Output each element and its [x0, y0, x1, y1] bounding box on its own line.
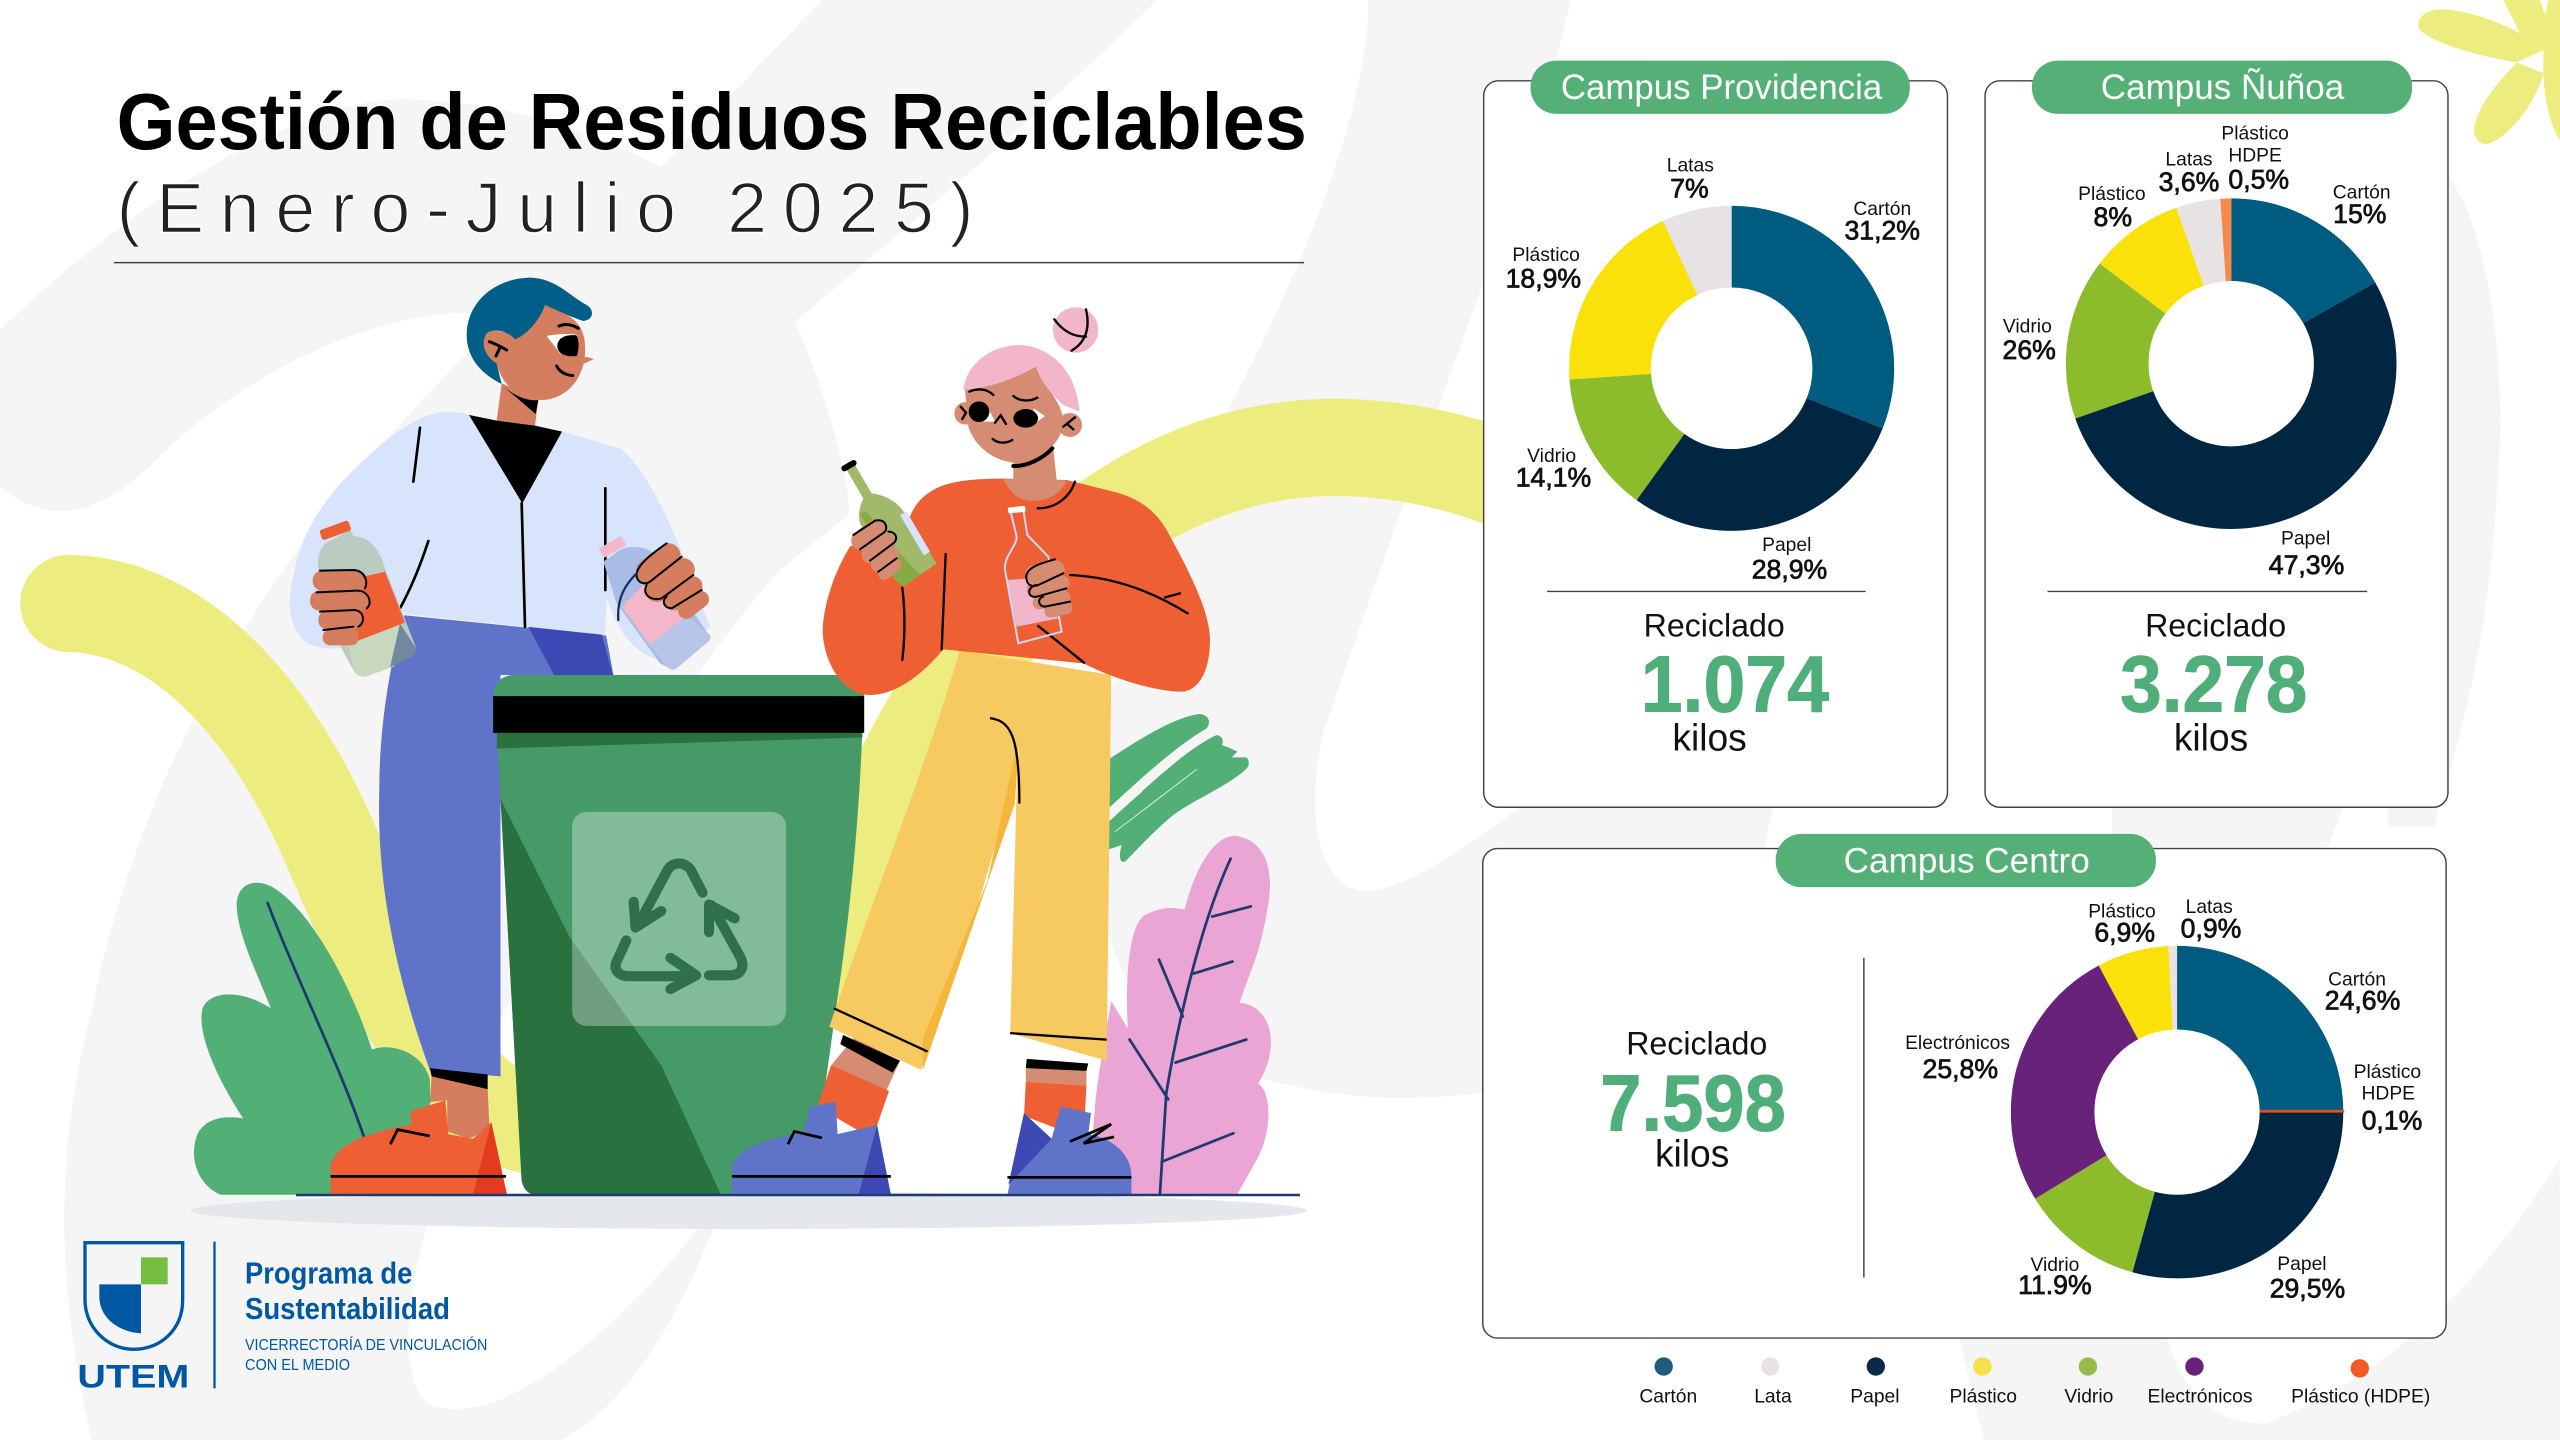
program name: Programa de [245, 1256, 412, 1290]
title heading: Gestión de Residuos Reciclables [117, 77, 1307, 166]
logo: UTEM Programa de Sustentabilidad [77, 1242, 487, 1395]
chart labels: Centro: Plástico [2088, 901, 2156, 922]
ground line [296, 1194, 1300, 1196]
icon: recycle arrows [616, 863, 742, 989]
chart labels: Ñuñoa: 3,6% [2159, 167, 2219, 197]
chart labels: Ñuñoa: 26% [2003, 335, 2056, 365]
green plant [194, 883, 432, 1195]
legend: Cartón [1639, 1386, 1697, 1407]
total: Centro: 7.598 [1600, 1059, 1786, 1148]
legend: Papel [1850, 1386, 1900, 1407]
chart labels: Centro: Papel [2277, 1254, 2327, 1275]
chart labels: Centro: Vidrio [2030, 1255, 2079, 1276]
chart labels: Centro: Electrónicos [1905, 1033, 2010, 1054]
chart labels: Providencia: Plástico [1512, 245, 1580, 266]
donut chart: Centro [2053, 988, 2301, 1237]
chart labels: Ñuñoa: Plástico [2221, 124, 2289, 145]
heading pill [1531, 61, 1910, 114]
decorative yellow flower [2418, 0, 2560, 144]
bin label [572, 812, 786, 1026]
heading pill: Campus Centro [1844, 841, 2090, 880]
man: upper body [290, 278, 712, 677]
bin body [497, 730, 862, 1195]
chart labels: Ñuñoa: Latas [2165, 149, 2213, 170]
man: shoe [331, 1100, 507, 1195]
man: right bottle [598, 536, 712, 670]
title [114, 77, 1307, 263]
total: Providencia: kilos [1672, 716, 1747, 758]
chart labels: Ñuñoa: Plástico [2078, 184, 2146, 205]
subtitle: (Enero-Julio 2025) [117, 168, 973, 248]
chart labels: Centro: 0,9% [2181, 914, 2241, 944]
chart labels: Providencia: 18,9% [1506, 263, 1581, 293]
chart labels: Centro: Latas [2186, 897, 2233, 918]
woman: head [954, 307, 1098, 466]
total: Centro: kilos [1655, 1132, 1729, 1174]
chart labels: Ñuñoa: 15% [2333, 199, 2386, 229]
total: Centro [1600, 1025, 1786, 1174]
chart labels: Providencia: Papel [1762, 535, 1811, 556]
illustration: people recycling [190, 278, 1306, 1229]
woman: upper body [823, 307, 1210, 695]
chart labels: Providencia [1506, 156, 1920, 585]
chart labels: Ñuñoa: 47,3% [2269, 550, 2344, 580]
legend: Lata [1754, 1386, 1792, 1407]
pink plant [1088, 836, 1271, 1195]
chart labels: Centro: 24,6% [2325, 985, 2400, 1015]
total: Ñuñoa: Reciclado [2145, 607, 2286, 643]
total: Providencia: 1.074 [1641, 640, 1829, 729]
chart labels: Providencia: 28,9% [1752, 555, 1827, 585]
chart labels: Providencia: Latas [1667, 156, 1714, 177]
woman: sweater [823, 479, 1210, 695]
donut chart: Providencia [1610, 247, 1853, 490]
man: head [467, 278, 594, 400]
total: Ñuñoa: 3.278 [2120, 640, 2307, 729]
chart labels: Ñuñoa: Cartón [2333, 182, 2391, 203]
legend: Electrónicos [2148, 1386, 2252, 1407]
panel: Campus Providencia [1484, 61, 1947, 807]
chart labels: Centro: Plástico [2354, 1062, 2421, 1083]
chart labels: Centro: 25,8% [1923, 1054, 1998, 1084]
clear bottle [1005, 506, 1074, 643]
legend: Plástico (HDPE) [2291, 1386, 2430, 1407]
woman: shoes [732, 1102, 1131, 1195]
panel: Campus Ñuñoa [1985, 61, 2448, 807]
chart labels: Providencia: Vidrio [1527, 446, 1576, 467]
total: Providencia: Reciclado [1644, 607, 1785, 643]
chart labels: Providencia: 7% [1670, 173, 1709, 203]
total: Providencia [1641, 607, 1829, 758]
heading pill [1776, 834, 2156, 887]
HDPE slice line [2260, 1110, 2344, 1113]
legend: Plástico [1950, 1386, 2017, 1407]
program name line 2: Sustentabilidad [245, 1292, 450, 1326]
decorative yellow swoosh [69, 447, 1580, 1131]
man: neck and undershirt [469, 383, 562, 503]
chart labels: Centro: 11.9% [2018, 1270, 2092, 1300]
total: Ñuñoa: kilos [2174, 716, 2248, 758]
woman: neck [1003, 448, 1067, 501]
man: legs [331, 615, 613, 1195]
panels area [1483, 61, 2448, 1407]
UTEM wordmark: UTEM [77, 1359, 189, 1395]
chart labels: Centro: Cartón [2328, 969, 2386, 990]
man: shirt [290, 412, 710, 662]
chart labels: Ñuñoa: HDPE [2228, 146, 2282, 167]
heading pill: Campus Providencia [1561, 68, 1883, 107]
icon: shield [85, 1243, 183, 1349]
department: VICERRECTORÍA DE VINCULACIÓN [245, 1337, 487, 1354]
green bottle [840, 459, 937, 587]
woman: trousers [829, 650, 1111, 1070]
recycling bin [493, 675, 864, 1195]
green brush strokes [1105, 714, 1249, 862]
ground shadow [190, 1192, 1306, 1229]
chart labels: Centro: 6,9% [2094, 917, 2155, 947]
chart labels: Providencia: 31,2% [1844, 216, 1920, 246]
total: Ñuñoa [2120, 607, 2307, 758]
chart labels: Ñuñoa [2003, 124, 2391, 580]
legend: Vidrio [2064, 1386, 2113, 1407]
chart labels: Centro: 0,1% [2362, 1106, 2422, 1136]
chart labels: Centro: 29,5% [2270, 1274, 2345, 1304]
chart labels: Ñuñoa: Vidrio [2003, 316, 2052, 337]
total: Centro: Reciclado [1626, 1025, 1767, 1061]
panel: Campus Centro [1483, 834, 2446, 1338]
chart labels: Ñuñoa: Papel [2281, 529, 2330, 550]
department line 2: CON EL MEDIO [245, 1357, 350, 1374]
legend [1639, 1357, 2430, 1407]
man: left bottle [310, 520, 416, 677]
chart labels: Providencia: Cartón [1853, 199, 1911, 220]
woman: legs [732, 650, 1131, 1195]
chart labels: Centro: HDPE [2362, 1083, 2415, 1104]
chart labels: Ñuñoa: 0,5% [2228, 164, 2289, 194]
heading pill [2032, 61, 2412, 114]
background plants [194, 836, 1271, 1195]
chart labels: Centro [1905, 897, 2422, 1304]
heading pill: Campus Ñuñoa [2101, 68, 2345, 107]
donut chart: Ñuñoa [2107, 240, 2355, 488]
bin lid [493, 675, 864, 698]
chart labels: Providencia: 14,1% [1516, 463, 1591, 493]
chart labels: Ñuñoa: 8% [2094, 202, 2132, 232]
